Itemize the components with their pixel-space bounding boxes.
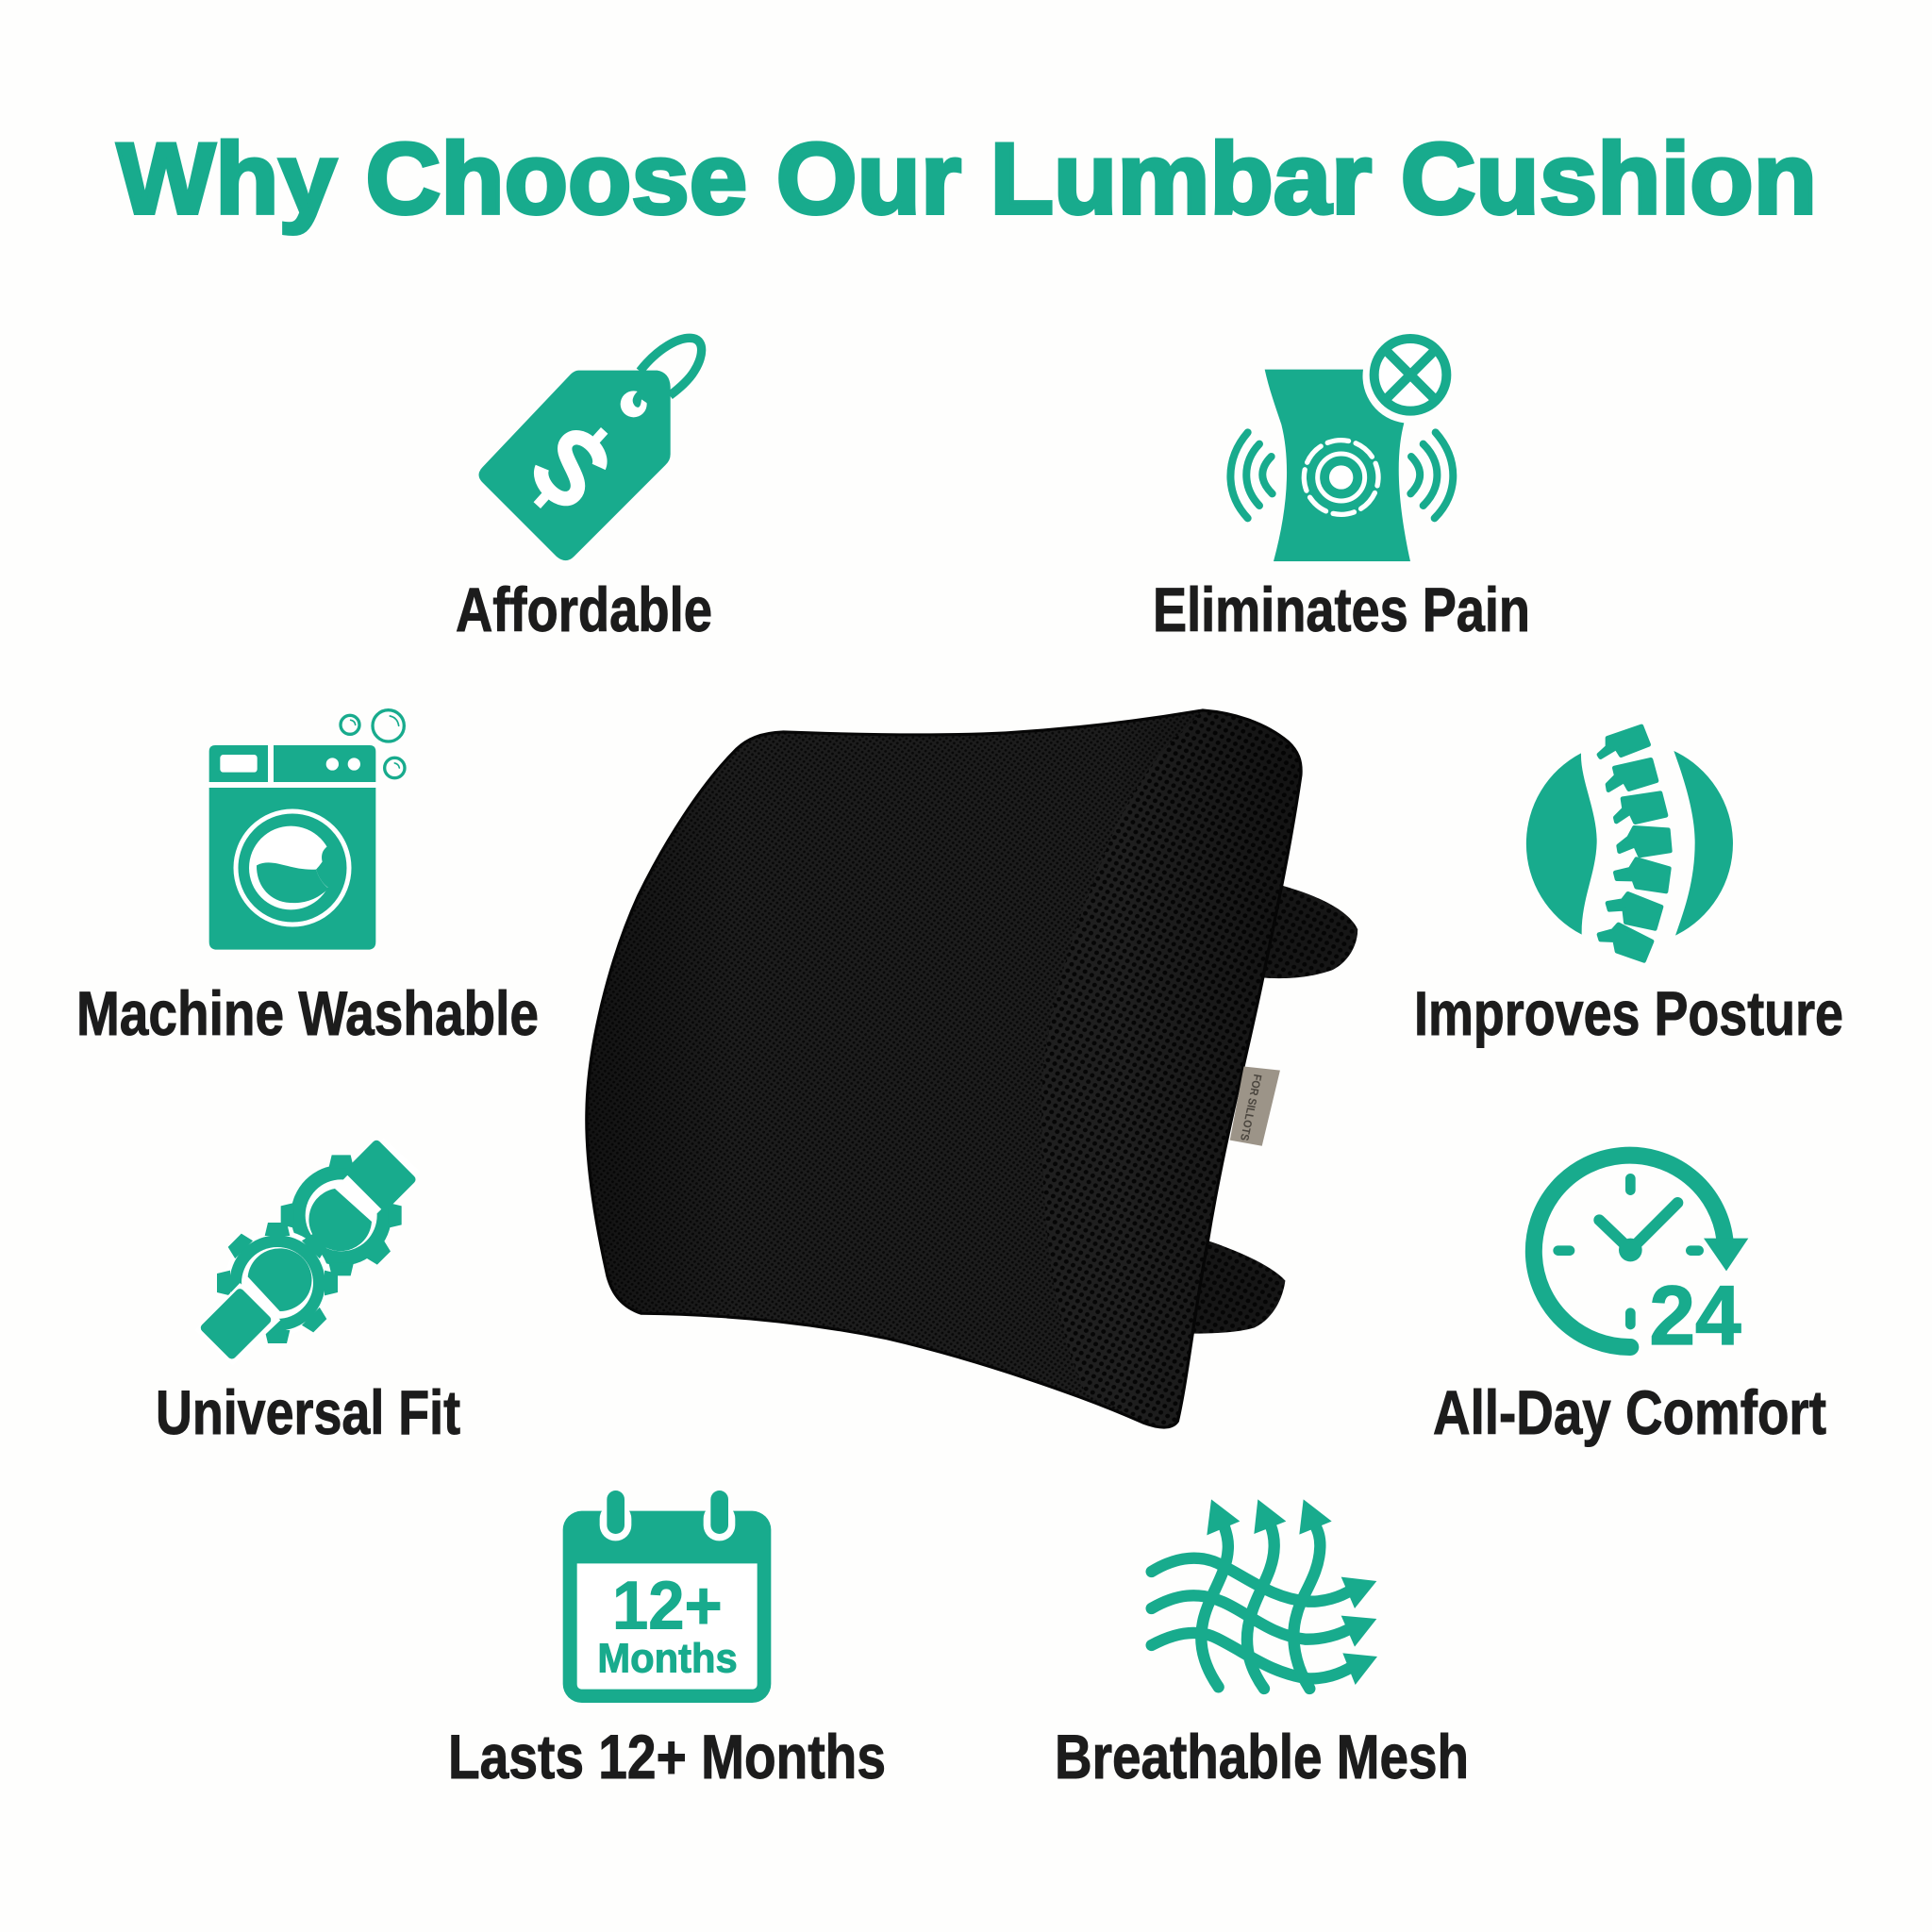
label: All-Day Comfort: All-Day Comfort [1433,1377,1826,1447]
label: Universal Fit: Universal Fit [156,1377,460,1447]
label: Machine Washable: Machine Washable [76,978,539,1048]
icon: calendar 12+ months [563,1491,771,1703]
product: black mesh lumbar cushion: FOR SILLOTS [1238,1074,1264,1141]
icon: 24 hour clock [1534,1156,1748,1362]
icon: 24 hour clock: 24 [1649,1268,1741,1362]
icon: interlocking gears [195,1138,420,1365]
icon: price tag [478,338,702,560]
label: Affordable: Affordable [456,575,712,644]
label: Improves Posture: Improves Posture [1414,978,1843,1048]
icon: breathable mesh arrows [1152,1499,1377,1689]
icon: washing machine [209,710,405,950]
icon: calendar 12+ months: 12+ [612,1568,723,1644]
title: Why Choose Our Lumbar Cushion [117,122,1817,235]
icon: calendar 12+ months: Months [597,1636,738,1682]
icon: torso with pain waves [1230,339,1453,561]
label: Breathable Mesh: Breathable Mesh [1055,1722,1469,1791]
icon: spine [1526,726,1733,960]
label: Eliminates Pain: Eliminates Pain [1153,575,1530,644]
product: black mesh lumbar cushion [587,710,1357,1427]
label: Lasts 12+ Months: Lasts 12+ Months [448,1722,886,1791]
